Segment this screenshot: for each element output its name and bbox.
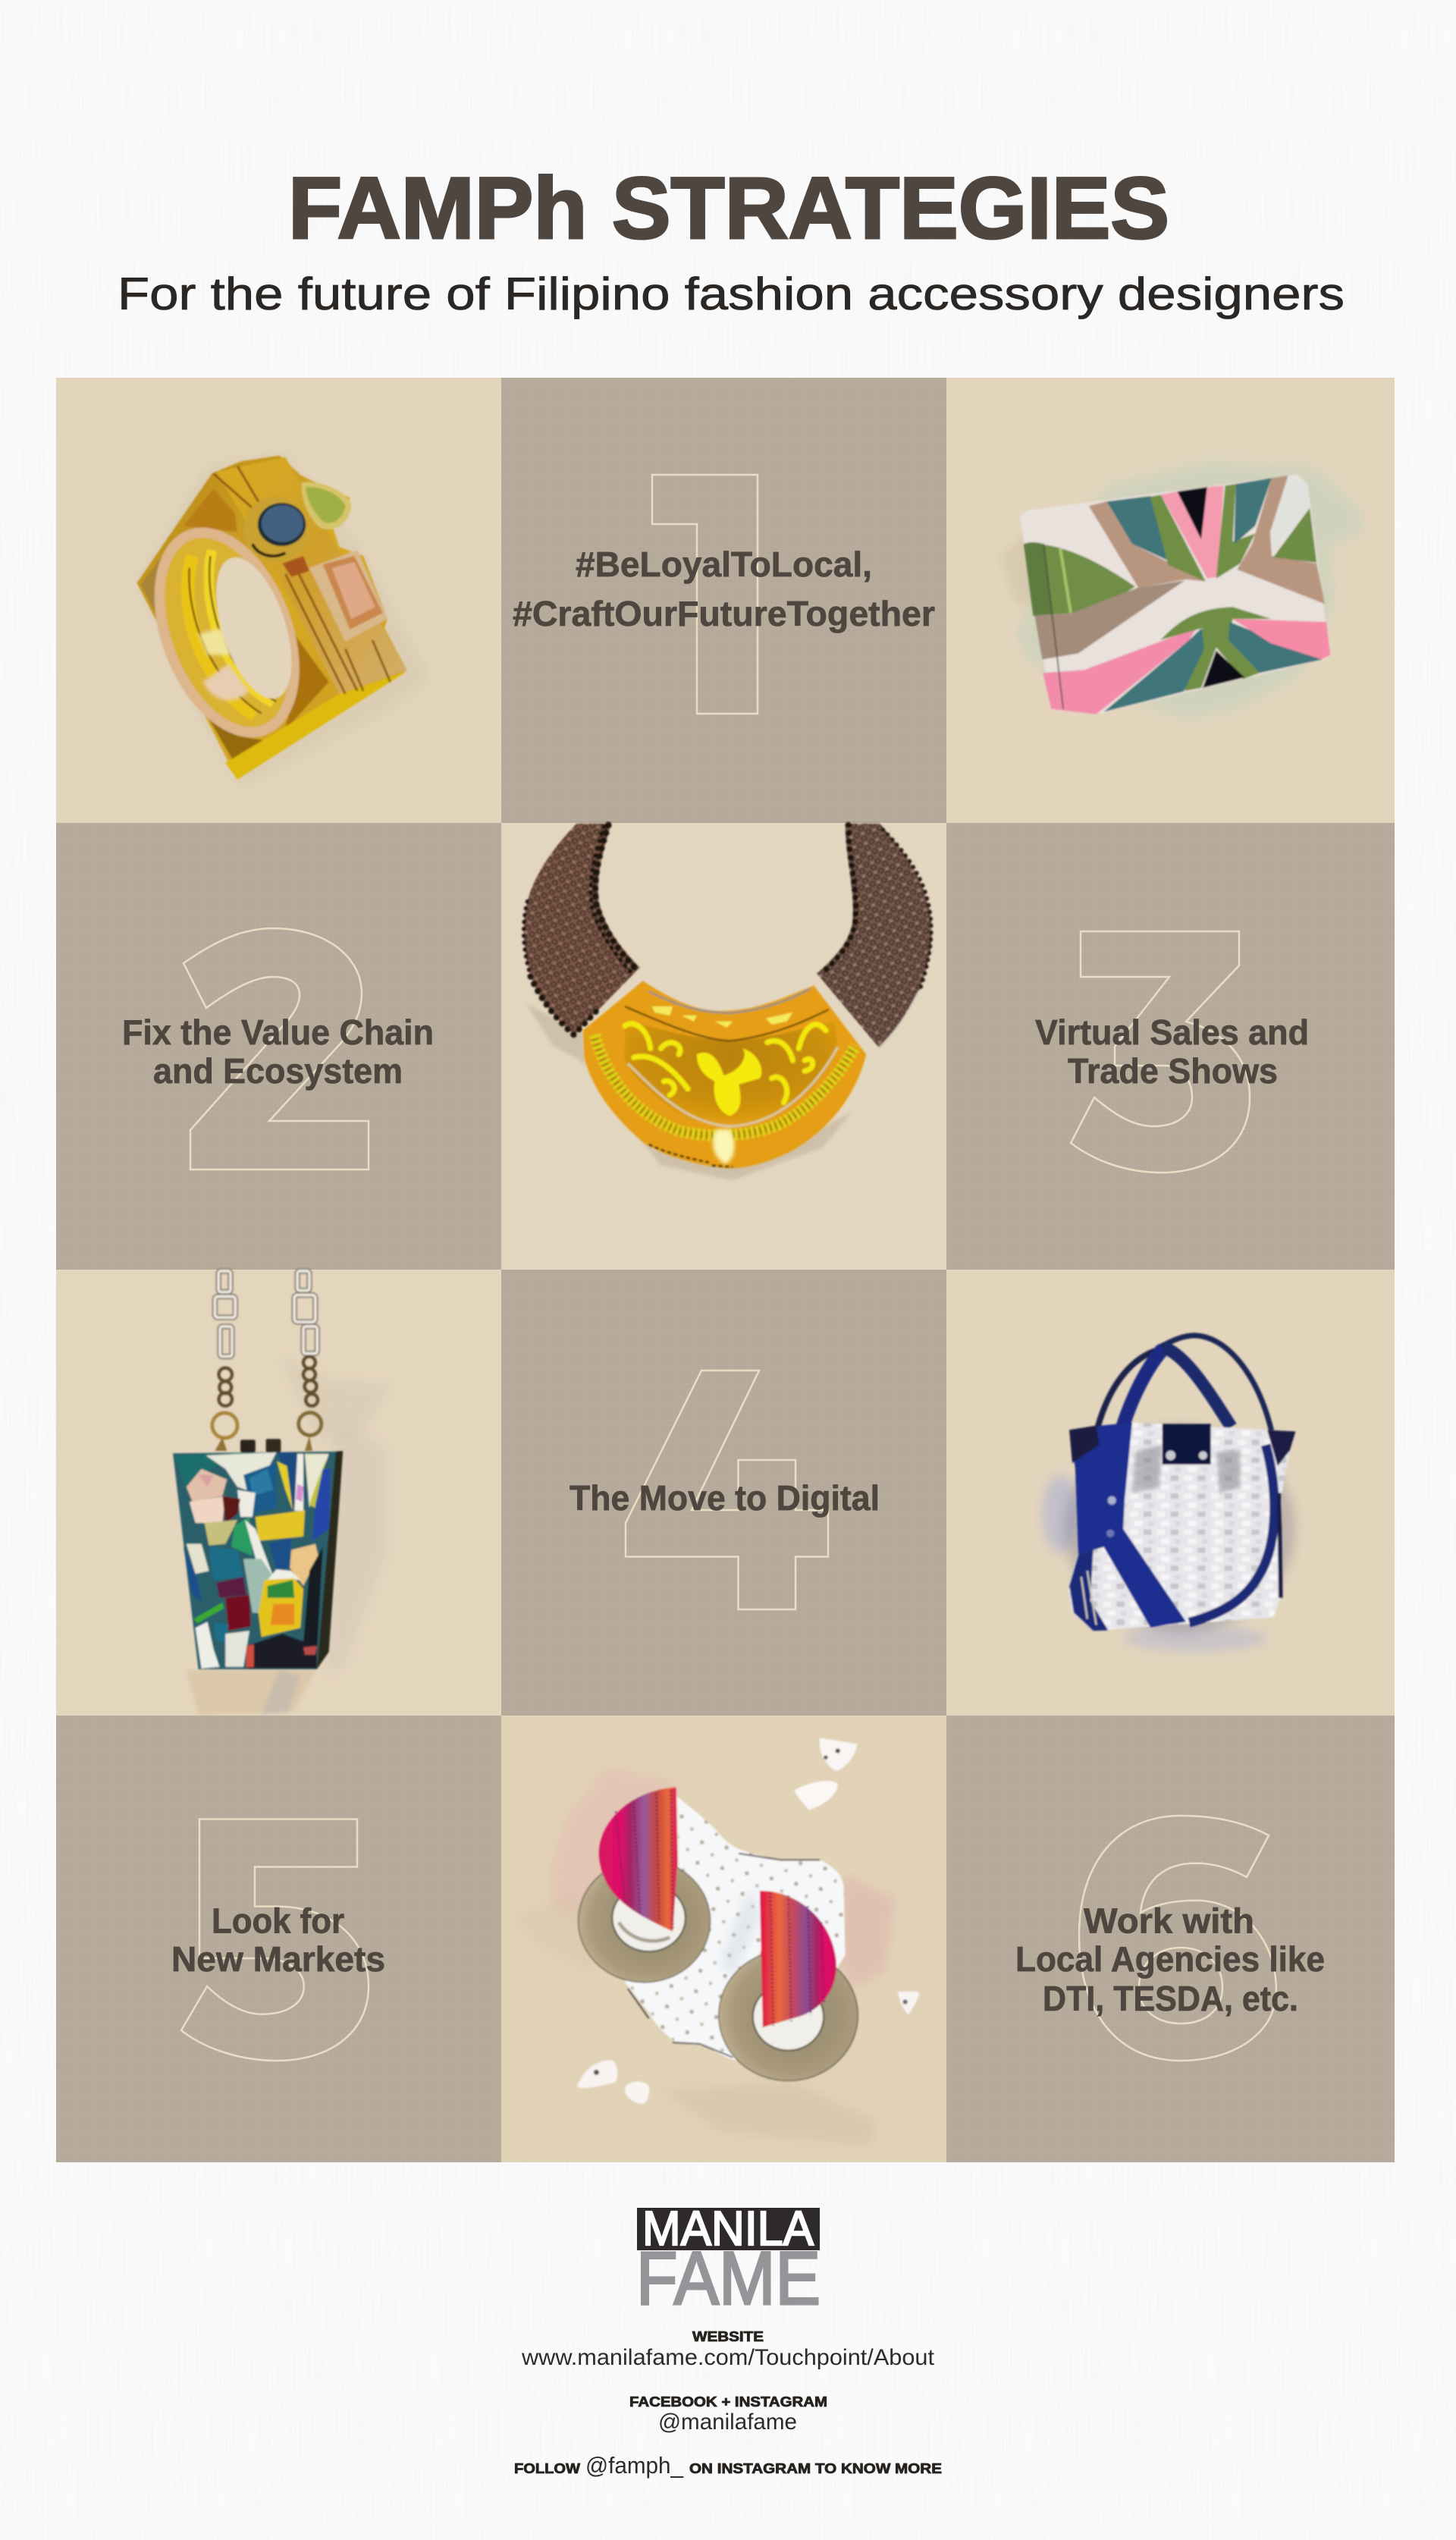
panel: strategy 2 (56, 823, 501, 1270)
panel: strategy 4 (501, 1270, 946, 1716)
numeral 3 (1071, 931, 1250, 1173)
icon: blue woven tote (1042, 1336, 1296, 1652)
strategy 6 text: DTI, TESDA, etc. (1043, 1979, 1298, 2018)
strategy 6 text: Local Agencies like (1015, 1939, 1325, 1979)
panel: woven tote image (946, 1270, 1395, 1716)
numeral 6 (1079, 1816, 1276, 2061)
numeral 2 (184, 928, 369, 1170)
icon: woven drop earrings with shells (511, 1738, 919, 2147)
numeral 1 (652, 475, 758, 714)
numeral 5 (181, 1819, 369, 2061)
strategy 2 text (122, 1013, 434, 1091)
panel: strategy 6 (946, 1716, 1395, 2162)
panel: collage bag image (56, 1270, 501, 1716)
strategy 2 text: and Ecosystem (153, 1051, 403, 1091)
numeral 4 (626, 1370, 828, 1609)
panel: clutch image (946, 378, 1395, 823)
social media contact (629, 2394, 827, 2435)
strategy 1 text: #BeLoyalToLocal, (576, 545, 872, 584)
social media contact: FACEBOOK + INSTAGRAM (629, 2394, 827, 2410)
strategy 2 text: Fix the Value Chain (122, 1013, 434, 1052)
icon: gold pendant necklace (524, 824, 932, 1180)
strategy 3 text (1035, 1013, 1309, 1091)
strategy 1 text (513, 545, 935, 633)
follow call to action (514, 2452, 942, 2479)
panel: strategy 3 (946, 823, 1395, 1270)
panel: necklace image (501, 823, 946, 1270)
panel: ring image (56, 378, 501, 823)
strategy 3 text: Virtual Sales and (1035, 1013, 1309, 1052)
strategy 1 text: #CraftOurFutureTogether (513, 594, 935, 633)
website contact (521, 2329, 935, 2370)
icon: gold ring (133, 451, 432, 790)
strategy 6 text: Work with (1084, 1901, 1254, 1940)
follow call to action: ON INSTAGRAM TO KNOW MORE (689, 2461, 942, 2476)
website contact: WEBSITE (692, 2329, 764, 2344)
logo: Manila FAME: FAME (636, 2236, 821, 2320)
title: FAMPh STRATEGIES (288, 160, 1169, 257)
panel: strategy 5 (56, 1716, 501, 2162)
icon: collage box bag on chain (173, 1271, 391, 1715)
strategy grid (56, 378, 1395, 2162)
strategy 5 text: Look for (212, 1901, 344, 1940)
logo: Manila FAME (636, 2201, 821, 2320)
follow call to action: FOLLOW (514, 2461, 580, 2476)
strategy 3 text: Trade Shows (1068, 1051, 1278, 1091)
subtitle: For the future of Filipino fashion accessory designers (118, 268, 1345, 319)
icon: painted clutch (1000, 460, 1363, 721)
logo: Manila FAME: MANILA (642, 2201, 814, 2256)
strategy 6 text (1015, 1901, 1325, 2018)
website contact: www.manilafame.com/Touchpoint/About (521, 2345, 935, 2370)
panel: strategy 1 (501, 378, 946, 823)
panel: earrings image (501, 1716, 946, 2162)
social media contact: @manilafame (658, 2410, 797, 2435)
strategy 4 text: The Move to Digital (570, 1478, 880, 1518)
strategy 5 text: New Markets (171, 1939, 385, 1979)
strategy 5 text (171, 1901, 385, 1979)
follow call to action: @famph_ (585, 2452, 684, 2479)
